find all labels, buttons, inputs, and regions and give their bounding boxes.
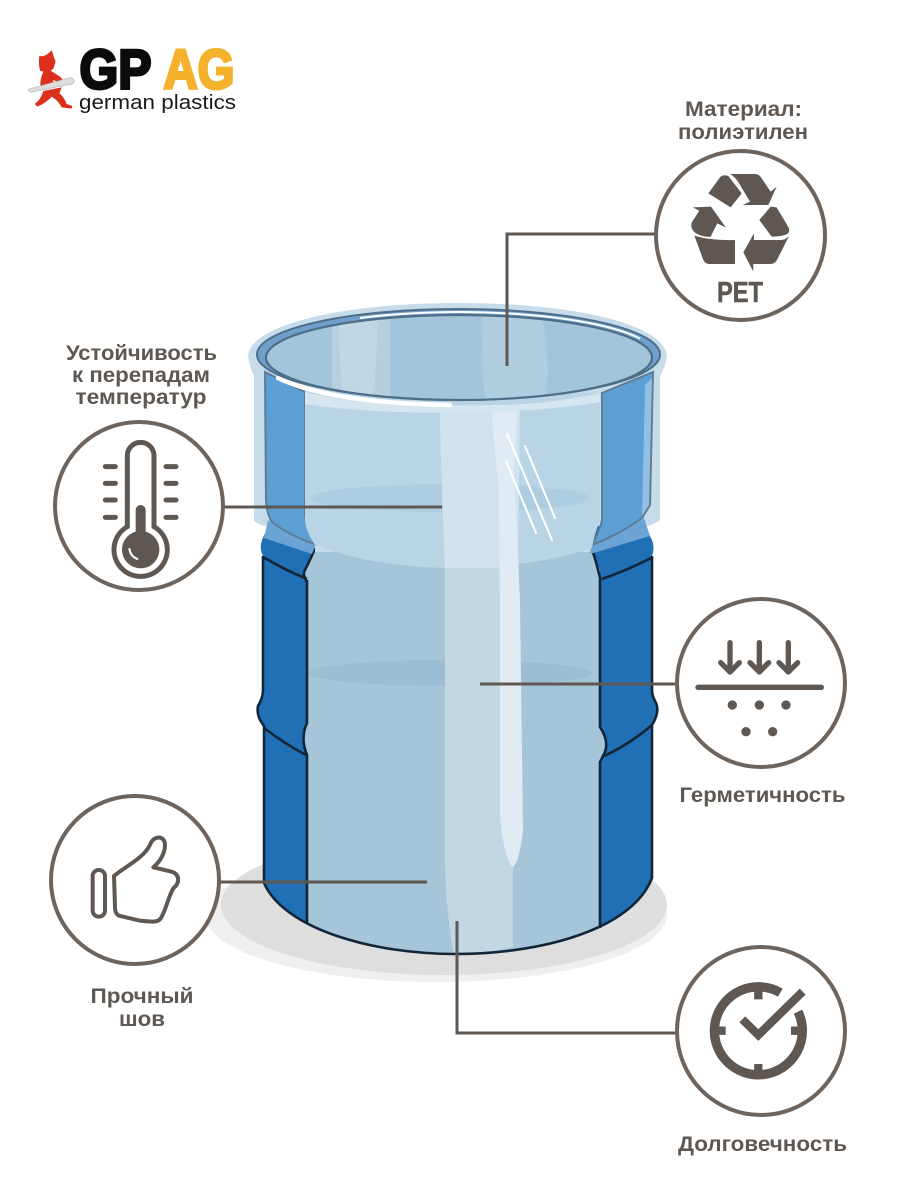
leader: seam bbox=[220, 880, 427, 884]
leader lines bbox=[220, 234, 676, 1033]
icon: red mascot carrying pipe bbox=[28, 50, 74, 109]
heading: temperature resistance: Устойчивость bbox=[66, 342, 217, 365]
icon circle: recycling PET bbox=[656, 151, 825, 320]
heading: material: Материал: bbox=[685, 98, 802, 121]
icon circle: thumbs up bbox=[51, 796, 219, 964]
heading: temperature resistance: к перепадам bbox=[72, 364, 210, 387]
white rim highlight bbox=[278, 378, 450, 405]
heading: material bbox=[678, 98, 808, 144]
rim outer bbox=[257, 309, 660, 400]
soft light band under rim bbox=[305, 392, 600, 413]
central light band bbox=[445, 540, 513, 953]
leader: temperature bbox=[224, 506, 442, 508]
label: durability: Долговечность bbox=[678, 1133, 847, 1156]
barrel band lines bbox=[263, 557, 653, 756]
logo wordmark GP: GP bbox=[80, 38, 152, 100]
collar halo bbox=[248, 303, 667, 552]
callout: strong seam bbox=[51, 796, 219, 1031]
narrow highlight bbox=[492, 405, 523, 867]
callout: temperature resistance bbox=[55, 342, 223, 590]
barrel centre front bbox=[304, 545, 606, 953]
collar right light strip bbox=[642, 378, 652, 516]
callout: durability bbox=[677, 947, 847, 1156]
rim inner opening bbox=[266, 315, 652, 400]
neck lighter band right bbox=[590, 518, 650, 554]
heading: material: полиэтилен bbox=[678, 121, 808, 144]
collar left panel bbox=[265, 372, 315, 544]
upper central band bbox=[440, 405, 520, 568]
icon label: PET: PET bbox=[717, 277, 763, 309]
barrel outline bbox=[258, 556, 657, 954]
logo tagline: german plastics bbox=[79, 92, 236, 114]
callout: material polyethylene bbox=[656, 98, 825, 320]
lower water ellipse bbox=[308, 660, 592, 686]
upper water ellipse bbox=[310, 484, 590, 512]
logo wordmark AG: AG bbox=[164, 38, 234, 100]
collar right panel bbox=[592, 372, 653, 545]
logo: GP AG german plastics bbox=[28, 38, 236, 114]
leader: material bbox=[507, 234, 656, 366]
barrel lower body bbox=[258, 522, 657, 954]
icon circle: thermometer bbox=[55, 422, 223, 590]
heading: temperature resistance bbox=[66, 342, 217, 409]
rim edge redraw bbox=[266, 315, 652, 400]
inner wall reflections bbox=[332, 316, 548, 398]
label: strong seam: шов bbox=[119, 1008, 165, 1031]
leader: durability bbox=[457, 921, 676, 1033]
icon circle: clock with check bbox=[677, 947, 845, 1115]
label: strong seam: Прочный bbox=[90, 985, 194, 1008]
label: tightness: Герметичность bbox=[680, 784, 846, 807]
collar front bbox=[305, 390, 600, 568]
icon circle: pressure arrows and dots bbox=[677, 599, 845, 767]
glass reflection lines bbox=[506, 434, 555, 540]
leader: tightness bbox=[480, 682, 676, 686]
barrel bbox=[248, 303, 667, 954]
barrel inner panel edges bbox=[304, 548, 606, 928]
callout: tightness bbox=[677, 599, 846, 807]
neck lighter band left bbox=[264, 520, 316, 554]
heading: temperature resistance: температур bbox=[76, 386, 206, 409]
top rim white highlight bbox=[360, 312, 640, 339]
floor shadow bbox=[205, 835, 667, 982]
label: strong seam bbox=[90, 985, 194, 1031]
